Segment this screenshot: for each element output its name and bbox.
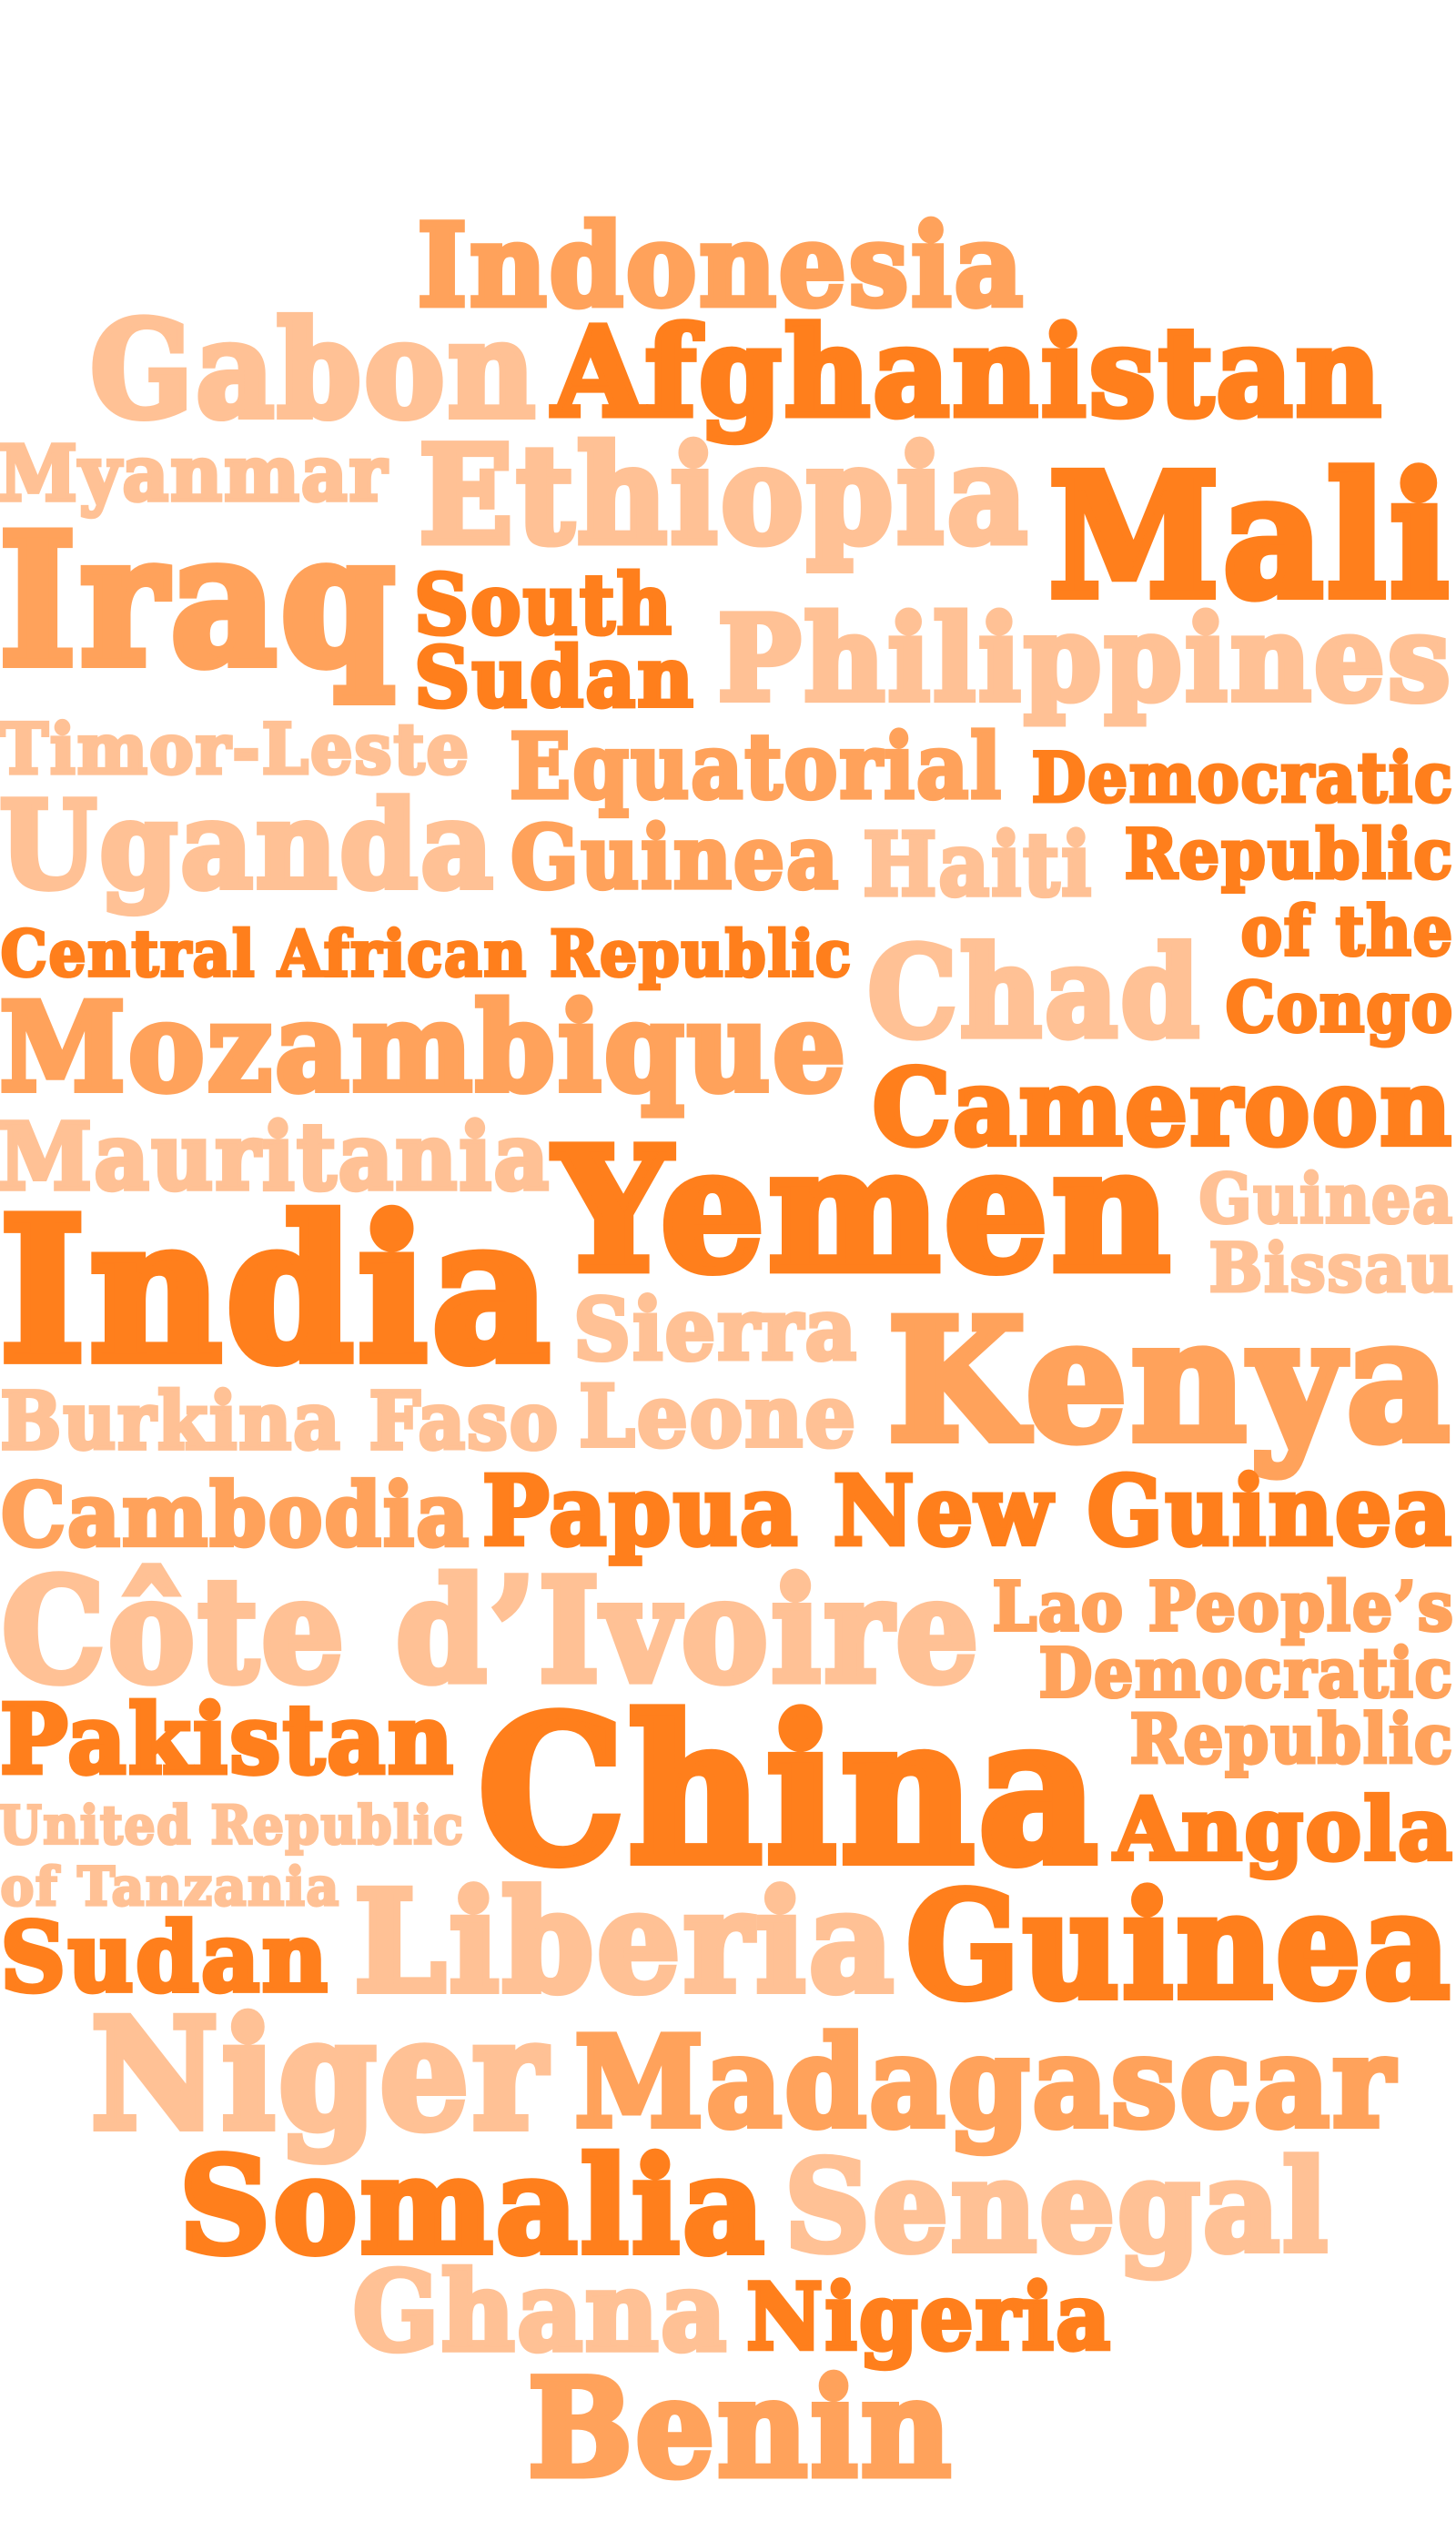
- word: Equatorial: Equatorial: [510, 714, 1003, 818]
- word: of Tanzania: of Tanzania: [0, 1856, 340, 1918]
- word: Sudan: Sudan: [1, 1901, 330, 2013]
- word: Ghana: Ghana: [353, 2249, 729, 2376]
- word: Chad: Chad: [868, 920, 1202, 1066]
- word: Iraq: Iraq: [0, 496, 399, 706]
- word: Angola: Angola: [1113, 1779, 1454, 1879]
- word: Gabon: Gabon: [91, 293, 539, 448]
- word: Afghanistan: Afghanistan: [551, 300, 1384, 444]
- word: Benin: Benin: [528, 2349, 955, 2506]
- word: Haiti: Haiti: [863, 815, 1094, 916]
- word: China: China: [479, 1675, 1102, 1908]
- word: Timor-Leste: Timor-Leste: [0, 708, 470, 790]
- word: India: India: [0, 1175, 555, 1405]
- word: Madagascar: Madagascar: [575, 2010, 1397, 2155]
- word: Côte d'Ivoire: Côte d’Ivoire: [2, 1547, 982, 1714]
- word: Mozambique: Mozambique: [0, 977, 848, 1119]
- word: Pakistan: Pakistan: [0, 1684, 456, 1796]
- word: Ethiopia: Ethiopia: [419, 416, 1031, 573]
- word: Leone: Leone: [579, 1366, 857, 1465]
- word: Sierra: Sierra: [573, 1280, 858, 1379]
- word: Central African Republic: Central African Republic: [1, 917, 853, 991]
- word: Mauritania: Mauritania: [0, 1103, 551, 1210]
- word: Somalia: Somalia: [180, 2129, 768, 2283]
- word: Senegal: Senegal: [785, 2133, 1330, 2280]
- word: United Republic: United Republic: [0, 1794, 464, 1856]
- word: South: South: [414, 557, 673, 653]
- word: Uganda: Uganda: [0, 775, 496, 915]
- word: Indonesia: Indonesia: [418, 200, 1026, 332]
- word: Sudan (South Sudan): Sudan: [414, 630, 695, 726]
- word: Liberia: Liberia: [354, 1860, 897, 2023]
- word: Myanmar: Myanmar: [0, 429, 389, 518]
- word: Niger: Niger: [91, 1986, 550, 2163]
- word: Cambodia: Cambodia: [1, 1464, 470, 1565]
- word: Yemen: Yemen: [553, 1110, 1175, 1309]
- word: Nigeria: Nigeria: [746, 2264, 1112, 2370]
- word: Burkina Faso: Burkina Faso: [0, 1376, 560, 1468]
- word: Guinea (Equatorial Guinea): Guinea: [511, 807, 841, 908]
